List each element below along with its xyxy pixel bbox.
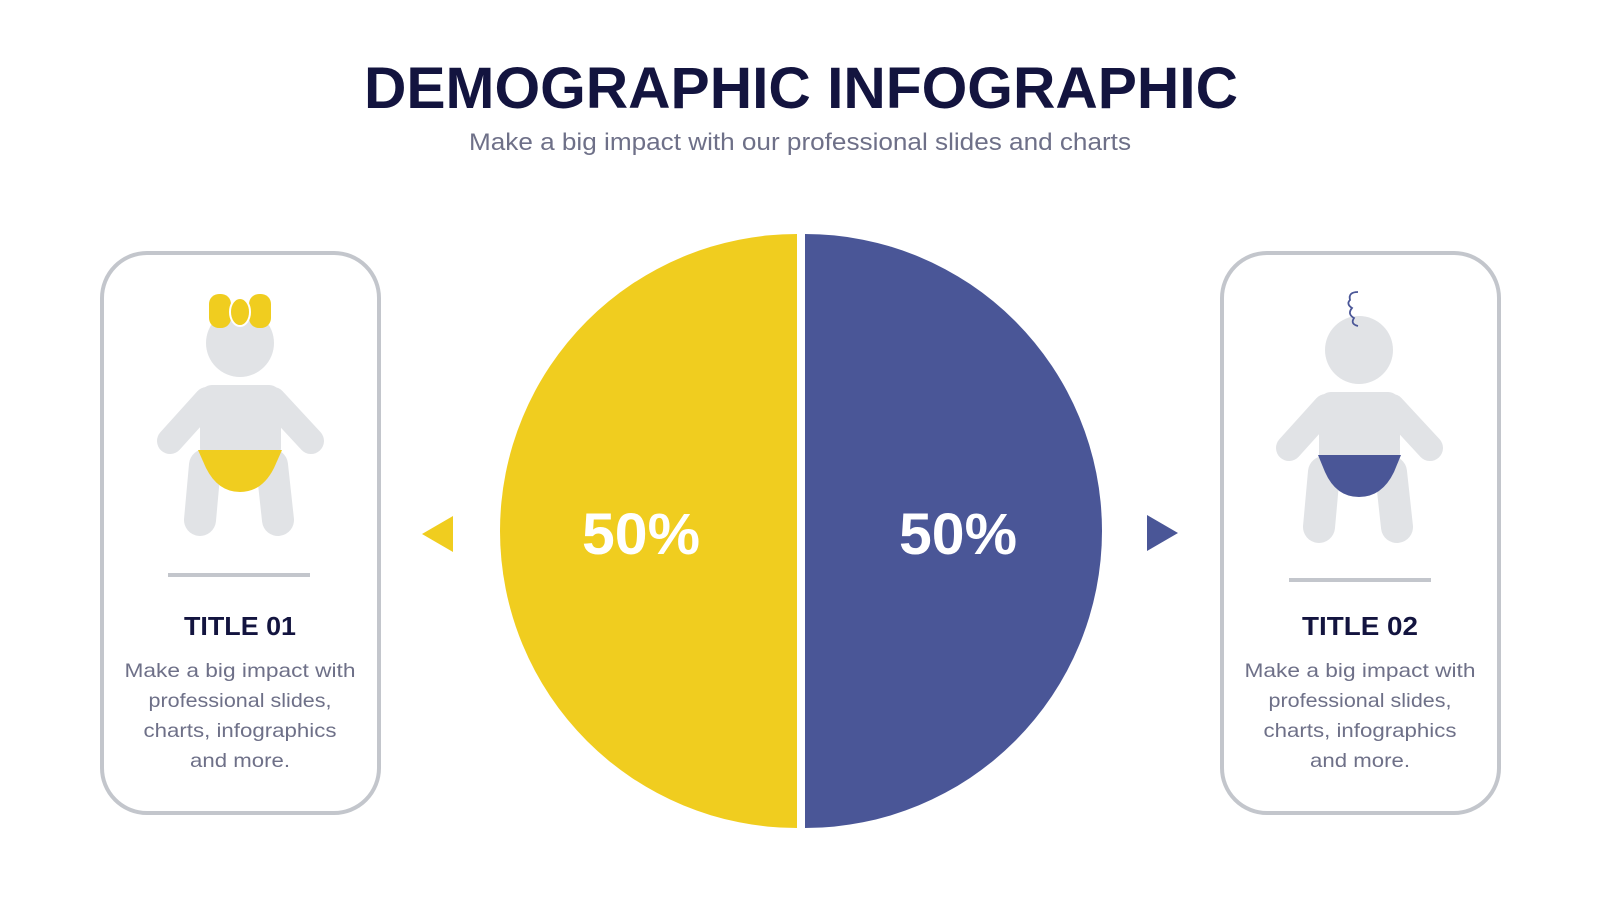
icon: baby boy (1289, 292, 1430, 527)
arrow: left yellow (422, 516, 453, 552)
text: body 02: and more. (1310, 750, 1410, 772)
text: body 02: charts, infographics (1264, 720, 1457, 742)
panel: title 02 (1222, 253, 1499, 813)
subtitle: Make a big impact with our professional slides and charts (469, 129, 1131, 156)
arrow: right blue (1147, 515, 1178, 551)
icon: baby girl (170, 294, 311, 520)
pie: yellow half (500, 234, 797, 828)
text: body 01: and more. (190, 750, 290, 772)
pie chart (500, 234, 1102, 828)
text: body 02: Make a big impact with (1244, 660, 1476, 682)
text: body 01: charts, infographics (144, 720, 337, 742)
label: left 50%: 50% (582, 502, 700, 567)
text: body 01: Make a big impact with (124, 660, 356, 682)
text: body 02: professional slides, (1268, 690, 1452, 712)
panel: title 01 (102, 253, 379, 813)
title: DEMOGRAPHIC INFOGRAPHIC (364, 56, 1238, 121)
heading: title 01: TITLE 01 (184, 611, 296, 641)
heading: title 02: TITLE 02 (1302, 611, 1418, 641)
text: body 01: professional slides, (148, 690, 332, 712)
pie: blue half (805, 234, 1102, 828)
label: right 50%: 50% (899, 502, 1017, 567)
